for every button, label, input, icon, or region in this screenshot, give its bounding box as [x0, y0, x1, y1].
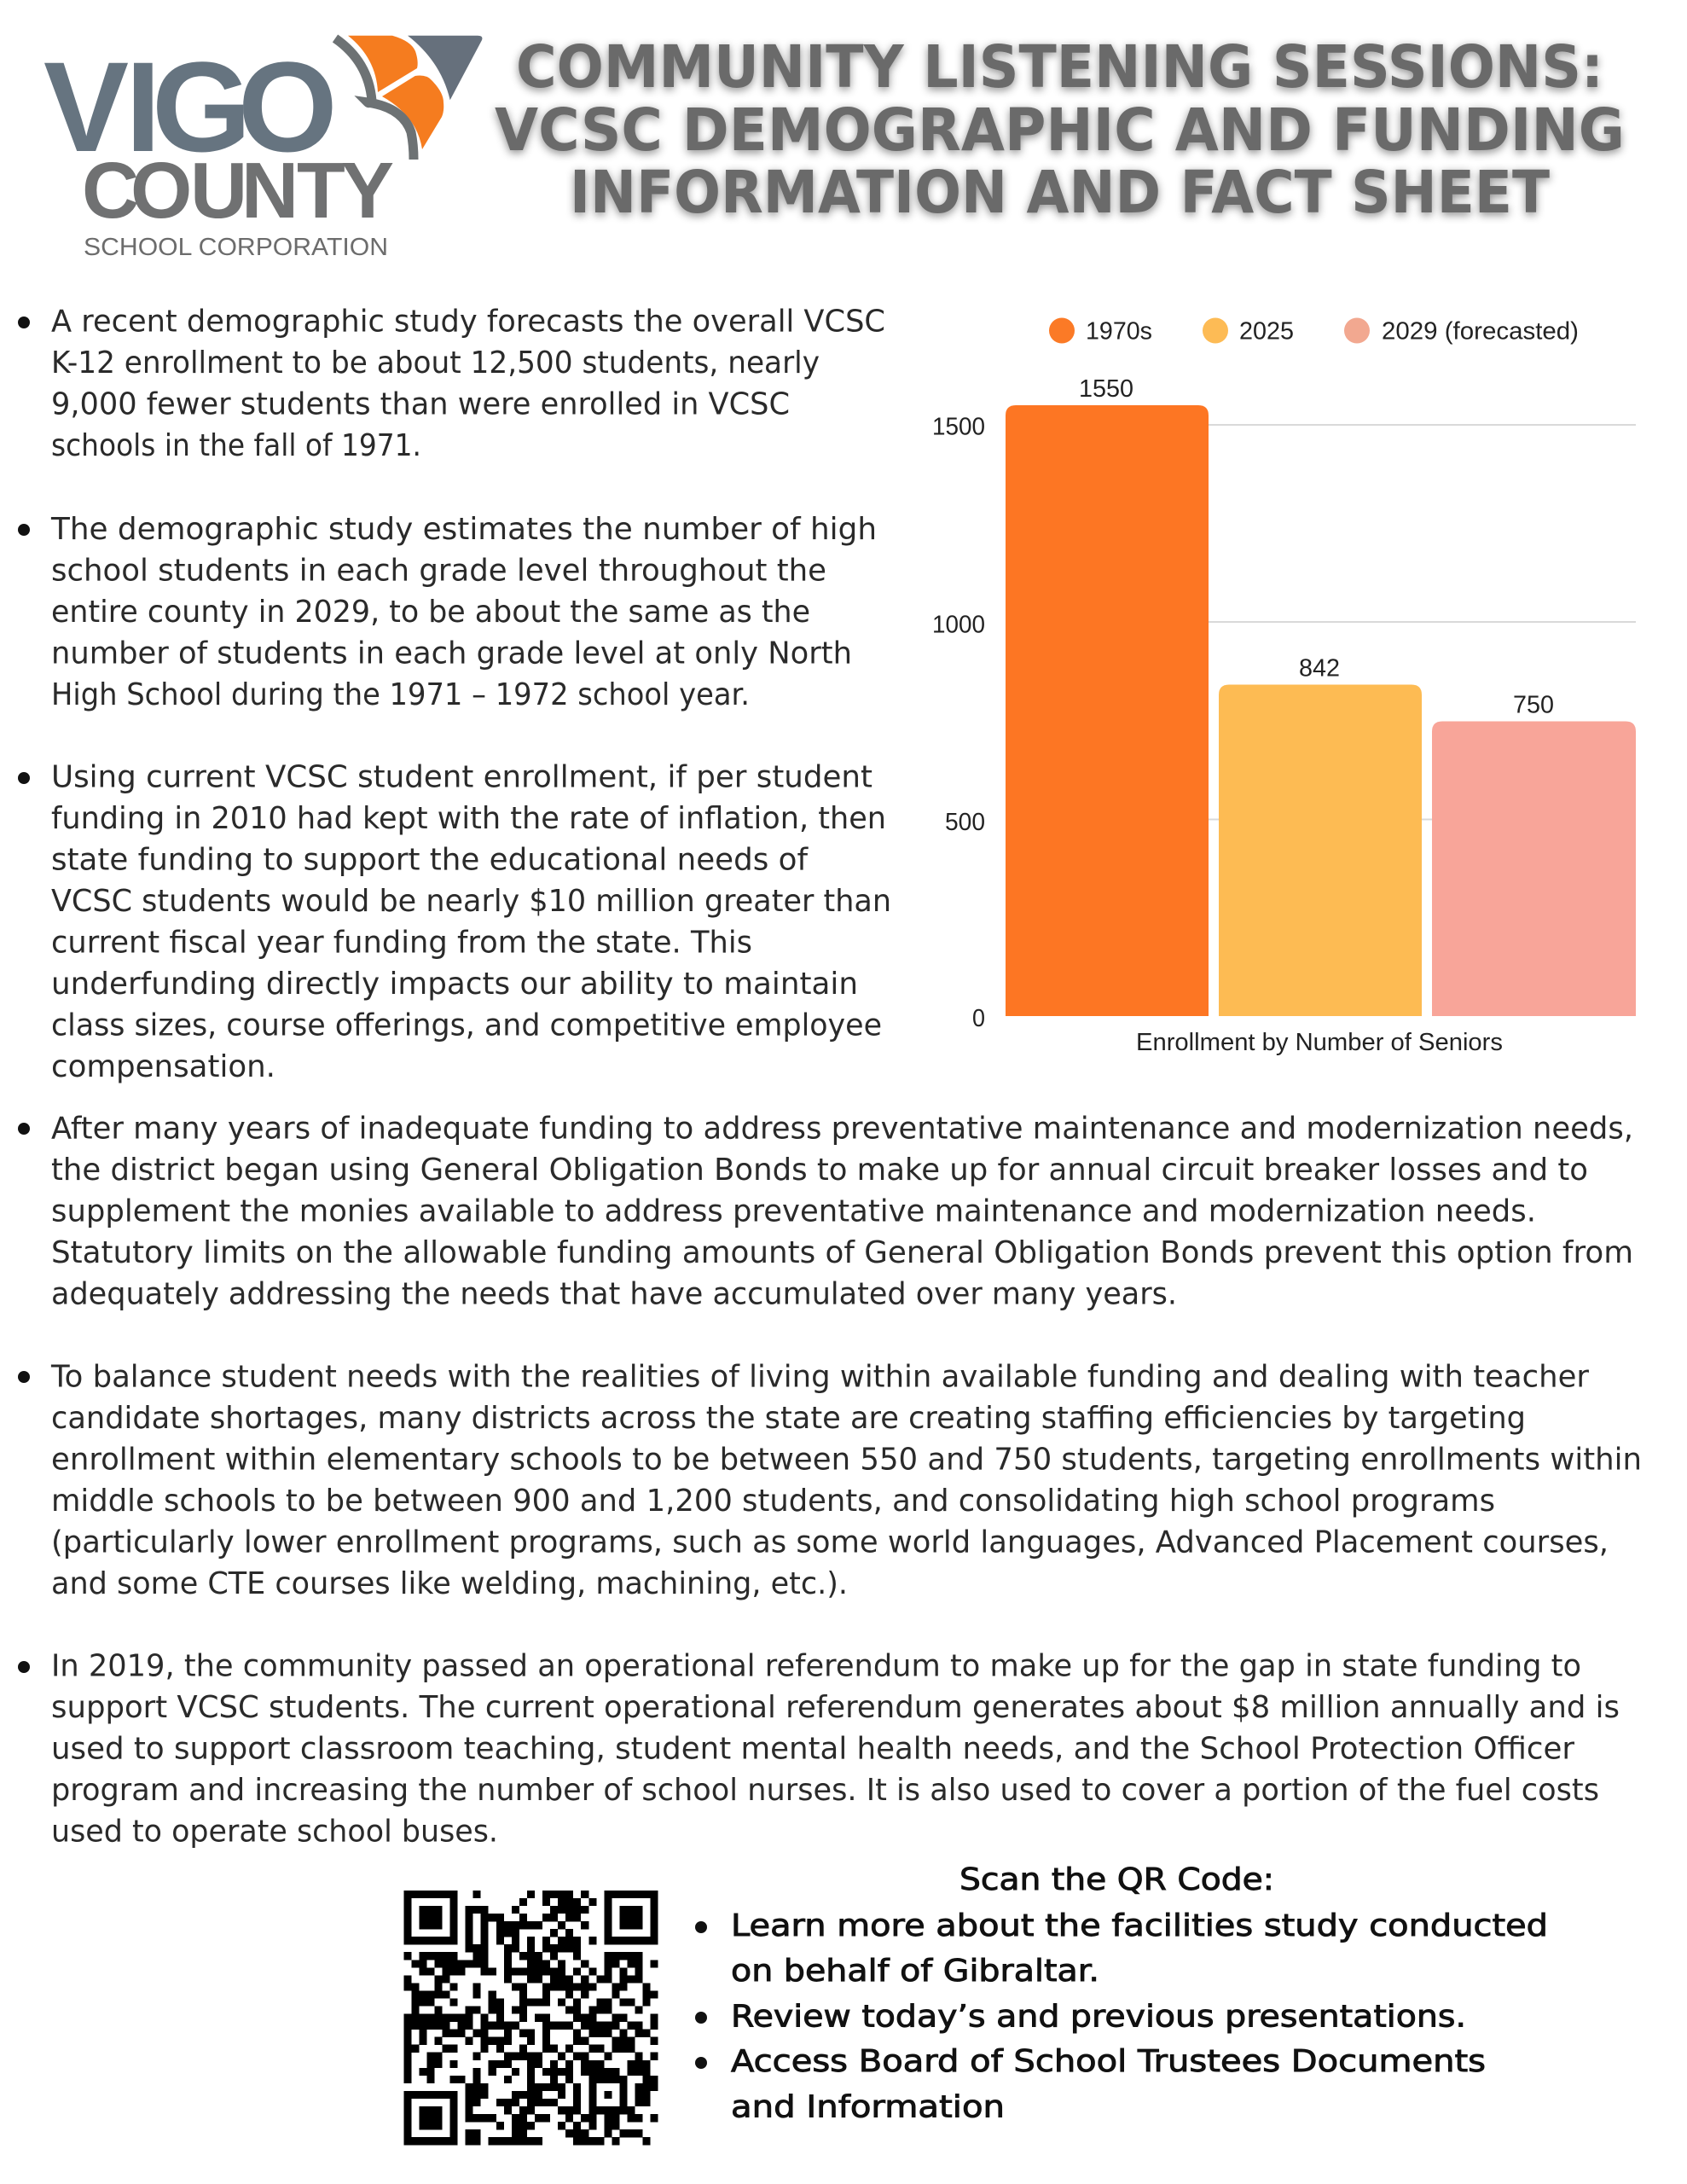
text block: staffing efficiencies	[18, 1360, 1642, 1601]
logo wordmark: VIGO	[43, 35, 338, 178]
chart legend: 2029 (forecasted)	[1382, 317, 1579, 345]
text block: general obligation bonds: the district began using General Obligation Bonds to make up for annual circuit breaker losses and to	[51, 1153, 1588, 1188]
text block: state funding vs inflation: Using current VCSC student enrollment, if per student	[51, 759, 872, 795]
y axis labels: 1500	[932, 413, 985, 440]
text block: enrollment forecast	[18, 304, 885, 463]
text block: enrollment forecast: A recent demographic study forecasts the overall VCSC	[51, 304, 885, 340]
text block: general obligation bonds: Statutory limits on the allowable funding amounts of General Obligation Bonds prevent this option from	[51, 1235, 1633, 1270]
text block: operational referendum: support VCSC students. The current operational referendum generates about $8 million annually and is	[51, 1690, 1620, 1725]
bar: 1970s 1550: 1550	[1079, 375, 1133, 403]
call to action: scan the QR code list: Review today’s and previous presentations.	[731, 2000, 1466, 2034]
bar: 2029 forecasted 750: 750	[1513, 691, 1554, 718]
text block: general obligation bonds	[18, 1111, 1633, 1312]
text block: high school estimate: The demographic study estimates the number of high	[50, 512, 877, 547]
text block: staffing efficiencies: middle schools to be between 900 and 1,200 students, and consolidating high school programs	[51, 1484, 1495, 1519]
text block: state funding vs inflation: current fiscal year funding from the state. This	[51, 925, 752, 961]
call to action: scan the QR code list: on behalf of Gibraltar.	[731, 1954, 1099, 1989]
logo wordmark: SCHOOL CORPORATION	[84, 234, 388, 261]
text block: operational referendum: In 2019, the community passed an operational referendum to make up for the gap in state funding to	[51, 1648, 1581, 1684]
call to action: scan the QR code list: Access Board of School Trustees Documents	[731, 2044, 1486, 2079]
x axis label: Enrollment by Number of Seniors	[1136, 1029, 1503, 1056]
title: COMMUNITY LISTENING SESSIONS:	[516, 33, 1603, 102]
text block: general obligation bonds: supplement the monies available to address preventative maintenance and modernization needs.	[51, 1194, 1536, 1228]
text block: operational referendum: used to support classroom teaching, student mental health needs, and the School Protection Officer	[51, 1732, 1574, 1766]
heading: Scan the QR Code: Scan the QR Code:	[959, 1862, 1274, 1897]
chart legend: 2025	[1239, 317, 1294, 345]
text block: operational referendum: used to operate school buses.	[51, 1814, 498, 1850]
call to action: scan the QR code list: Learn more about the facilities study conducted	[731, 1908, 1548, 1943]
text block: state funding vs inflation: class sizes, course offerings, and competitive employee	[51, 1008, 882, 1043]
logo wordmark: COUNTY	[82, 146, 394, 235]
QR code	[403, 1895, 658, 2141]
text block: high school estimate: High School during the 1971 – 1972 school year.	[51, 677, 750, 712]
bar chart: enrollment by number of seniors	[932, 317, 1636, 1056]
text block: staffing efficiencies: and some CTE courses like welding, machining, etc.).	[51, 1566, 848, 1601]
text block: state funding vs inflation: funding in 2010 had kept with the rate of inflation, then	[51, 801, 886, 836]
text block: high school estimate: number of students in each grade level at only North	[51, 636, 852, 671]
logo wordmark	[43, 35, 394, 261]
logo: Vigo County School Corporation	[43, 35, 482, 261]
text block: enrollment forecast: K-12 enrollment to be about 12,500 students, nearly	[51, 346, 820, 380]
text block: state funding vs inflation	[18, 759, 891, 1084]
bar: 2025 842: 842	[1299, 655, 1340, 682]
bar: 2025 842	[1219, 655, 1422, 1016]
text block: operational referendum	[18, 1648, 1620, 1850]
logo emblem	[335, 36, 482, 160]
text block: operational referendum: program and increasing the number of school nurses. It is also used to cover a portion of the fuel costs	[51, 1773, 1599, 1808]
chart legend	[1049, 317, 1579, 345]
text block: state funding vs inflation: compensation.	[51, 1049, 275, 1084]
text block: enrollment forecast: 9,000 fewer students than were enrolled in VCSC	[51, 387, 790, 421]
y axis labels: 500	[945, 809, 985, 836]
text block: staffing efficiencies: To balance student needs with the realities of living within available funding and dealing with teacher	[50, 1360, 1589, 1394]
call to action: scan the QR code list	[695, 1862, 1548, 2124]
text block: general obligation bonds: adequately addressing the needs that have accumulated over many years.	[51, 1276, 1177, 1312]
title: VCSC DEMOGRAPHIC AND FUNDING	[495, 96, 1625, 165]
bar: 1970s 1550	[1006, 375, 1209, 1016]
chart legend: 1970s	[1086, 317, 1152, 345]
y axis labels: 0	[972, 1005, 985, 1032]
text block: staffing efficiencies: candidate shortages, many districts across the state are creating staffing efficiencies by targeting	[51, 1401, 1526, 1436]
text block: enrollment forecast: schools in the fall of 1971.	[51, 428, 421, 463]
text block: state funding vs inflation: underfunding directly impacts our ability to maintain	[51, 967, 858, 1002]
call to action: scan the QR code list: and Information	[731, 2090, 1005, 2124]
title	[495, 33, 1625, 227]
text block: high school estimate	[18, 512, 877, 712]
text block: staffing efficiencies: (particularly lower enrollment programs, such as some world languages, Advanced Placement courses,	[51, 1525, 1609, 1560]
y axis labels	[932, 413, 985, 1032]
text block: staffing efficiencies: enrollment within elementary schools to be between 550 and 750 students, targeting enrollments within	[51, 1442, 1642, 1478]
y axis labels: 1000	[932, 611, 985, 638]
title: INFORMATION AND FACT SHEET	[570, 159, 1550, 227]
text block: state funding vs inflation: VCSC students would be nearly $10 million greater than	[51, 884, 891, 919]
bar: 2029 forecasted 750	[1432, 691, 1636, 1016]
text block: general obligation bonds: After many years of inadequate funding to address preventative maintenance and modernization needs,	[51, 1111, 1633, 1147]
text block: high school estimate: school students in each grade level throughout the	[51, 553, 826, 589]
text block: state funding vs inflation: state funding to support the educational needs of	[51, 843, 809, 877]
text block: high school estimate: entire county in 2029, to be about the same as the	[51, 595, 810, 630]
